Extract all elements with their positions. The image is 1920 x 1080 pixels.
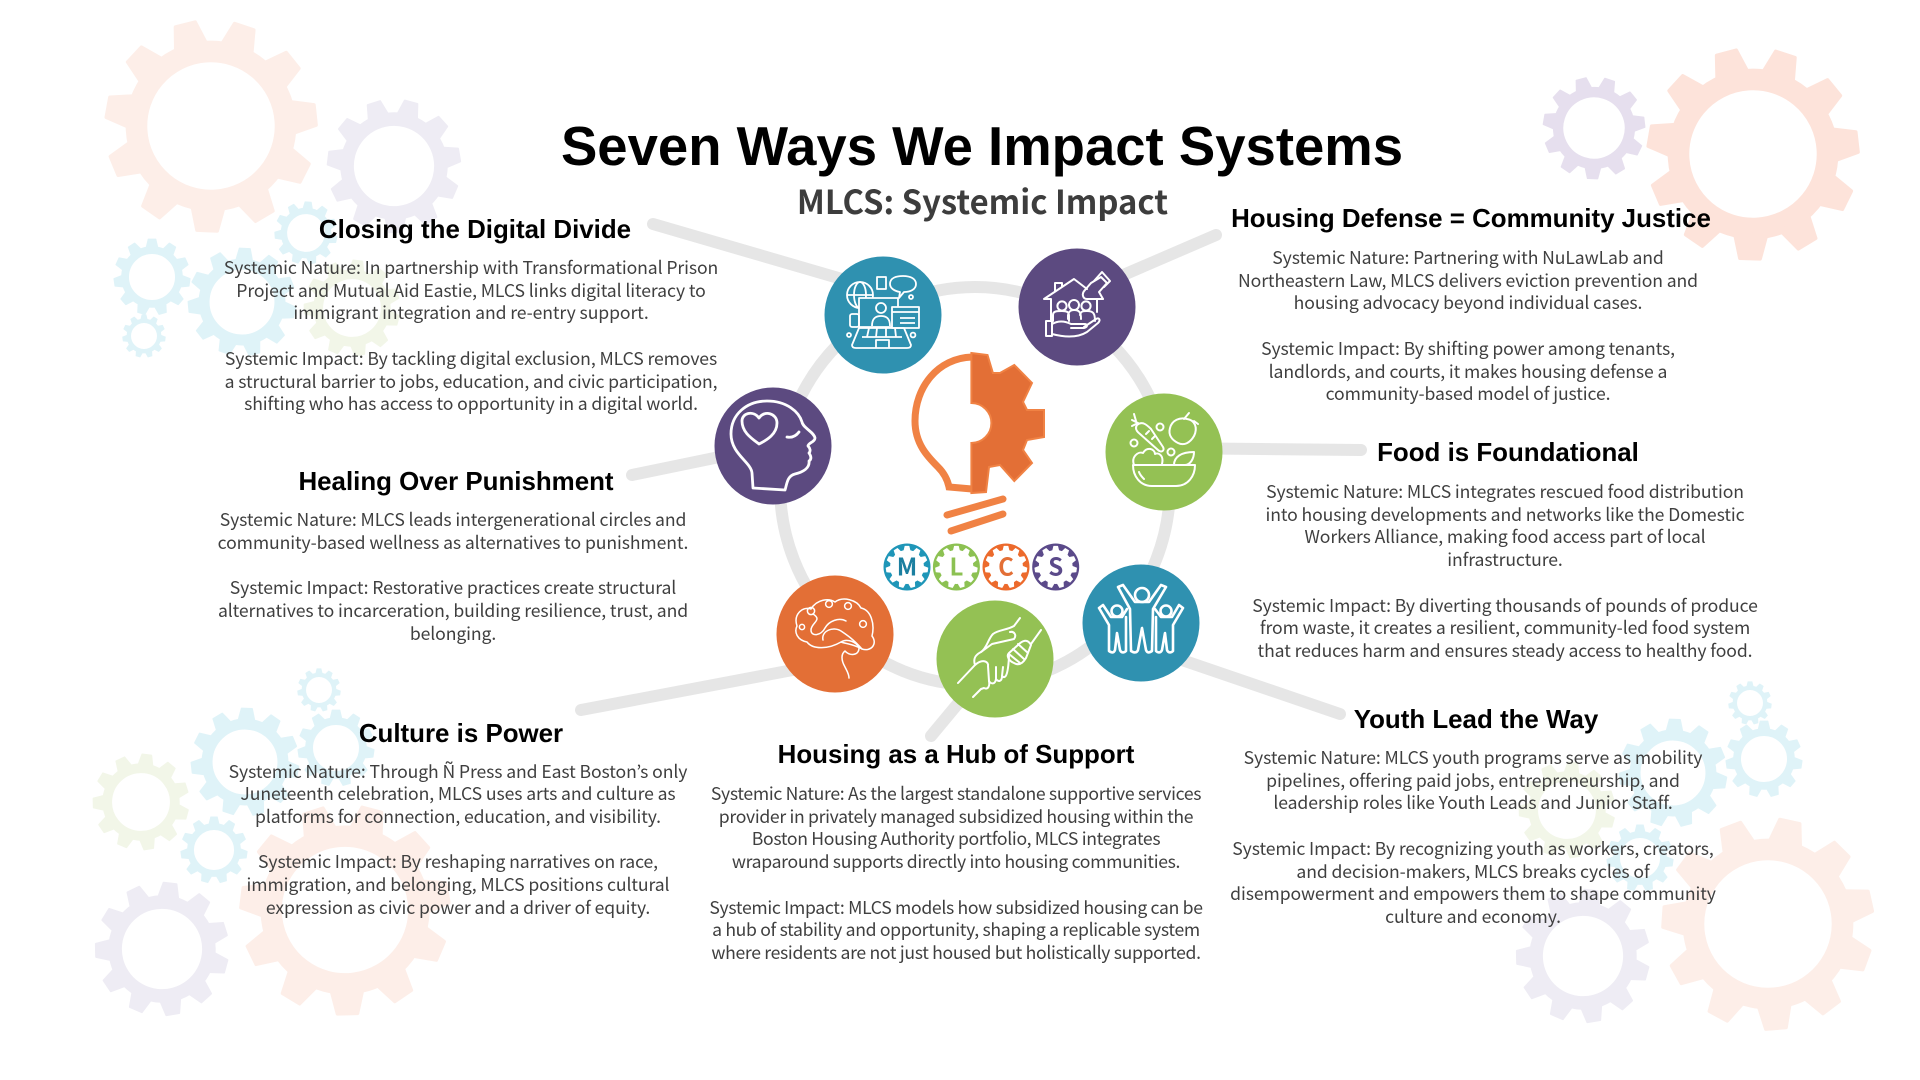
central lightbulb gear logo [915,353,1044,531]
body text [1230,745,1716,929]
body text: housing advocacy beyond individual cases. [1294,290,1642,315]
icon: helping hands [936,600,1054,718]
body text [224,255,718,416]
body text: platforms for connection, education, and visibility. [255,804,661,829]
body text: Systemic Impact: By recognizing youth as workers, creators, [1232,836,1714,861]
body text: where residents are not just housed but holistically supported. [711,940,1201,965]
body text [229,758,688,920]
body text: Systemic Nature: MLCS youth programs serve as mobility [1244,745,1702,770]
body text: landlords, and courts, it makes housing defense a [1269,359,1667,384]
subtitle: MLCS: Systemic Impact [797,177,1168,224]
heading: Food is Foundational [1377,438,1639,466]
body text: Systemic Impact: By reshaping narratives on race, [258,849,658,874]
body text: Project and Mutual Aid Eastie, MLCS links digital literacy to [236,278,706,303]
body text: Juneteenth celebration, MLCS uses arts and culture as [240,781,676,806]
panel: housing defense [1231,204,1711,406]
body text [218,507,688,646]
body text: shifting who has access to opportunity in a digital world. [244,391,698,416]
body text: immigrant integration and re-entry support. [293,300,649,325]
body text: Systemic Nature: MLCS integrates rescued food distribution [1266,479,1744,504]
panel: youth lead the way [1230,706,1716,929]
body text: community-based wellness as alternatives to punishment. [218,530,688,555]
MLCS gear badges: S [1048,548,1063,582]
body text: and decision-makers, MLCS breaks cycles of [1296,859,1650,884]
icon: housing defense [1018,248,1136,366]
MLCS gear badges: M [897,548,917,582]
body text: Workers Alliance, making food access part of local [1304,524,1706,549]
icon: heart in head [714,388,832,504]
body text [709,781,1203,965]
body text: belonging. [410,621,496,646]
body text: Systemic Impact: By diverting thousands of pounds of produce [1252,593,1758,618]
panel: healing over punishment [218,468,688,646]
body text: into housing developments and networks like the Domestic [1266,502,1744,527]
body text [1238,245,1698,406]
body text: pipelines, offering paid jobs, entrepreneurship, and [1266,768,1680,793]
panel: culture is power [229,720,688,920]
body text: Northeastern Law, MLCS delivers eviction prevention and [1238,268,1698,293]
body text: Systemic Impact: By shifting power among tenants, [1261,336,1675,361]
heading: Healing Over Punishment [298,468,614,496]
body text: a hub of stability and opportunity, shaping a replicable system [712,917,1200,942]
body text: Systemic Impact: By tackling digital exclusion, MLCS removes [225,346,717,371]
connector ring and spokes [581,224,1361,736]
panel: housing as a hub of support [709,741,1203,965]
panel: food is foundational [1252,438,1758,663]
body text: Systemic Nature: MLCS leads intergenerational circles and [220,507,686,532]
title: Seven Ways We Impact Systems [561,116,1403,177]
body text: a structural barrier to jobs, education, and civic participation, [225,369,717,394]
body text [1252,479,1758,663]
heading: Culture is Power [359,720,563,748]
body text: from waste, it creates a resilient, community-led food system [1260,615,1750,640]
icon: brain [776,576,894,692]
MLCS gear badges [884,544,1079,590]
body text: infrastructure. [1447,547,1563,572]
body text: wraparound supports directly into housing communities. [732,849,1180,874]
body text: immigration, and belonging, MLCS positions cultural [247,872,669,897]
heading: Closing the Digital Divide [319,216,631,244]
icon: youth group [1082,564,1200,682]
body text: Boston Housing Authority portfolio, MLCS integrates [752,826,1160,851]
MLCS gear badges: L [949,548,963,582]
body text: Systemic Impact: Restorative practices create structural [230,575,676,600]
body text: expression as civic power and a driver of equity. [266,895,650,920]
heading: Housing as a Hub of Support [778,741,1134,769]
body text: alternatives to incarceration, building resilience, trust, and [218,598,688,623]
body text: leadership roles like Youth Leads and Junior Staff. [1273,790,1673,815]
body text: Systemic Nature: In partnership with Transformational Prison [224,255,718,280]
body text: Systemic Nature: Partnering with NuLawLab and [1272,245,1664,270]
body text: Systemic Impact: MLCS models how subsidized housing can be [709,895,1203,920]
body text: community-based model of justice. [1326,381,1610,406]
body text: Systemic Nature: As the largest standalone supportive services [711,781,1201,806]
icon: digital access [824,256,942,374]
MLCS gear badges: C [998,548,1014,582]
icon: food [1106,394,1222,510]
body text: disempowerment and empowers them to shape community [1230,881,1716,906]
body text: that reduces harm and ensures steady access to healthy food. [1258,638,1752,663]
body text: Systemic Nature: Through Ñ Press and East Boston’s only [229,758,687,784]
heading: Housing Defense = Community Justice [1231,204,1711,232]
body text: culture and economy. [1385,904,1561,929]
panel: closing the digital divide [224,216,718,416]
body text: provider in privately managed subsidized housing within the [719,804,1193,829]
heading: Youth Lead the Way [1354,706,1598,734]
